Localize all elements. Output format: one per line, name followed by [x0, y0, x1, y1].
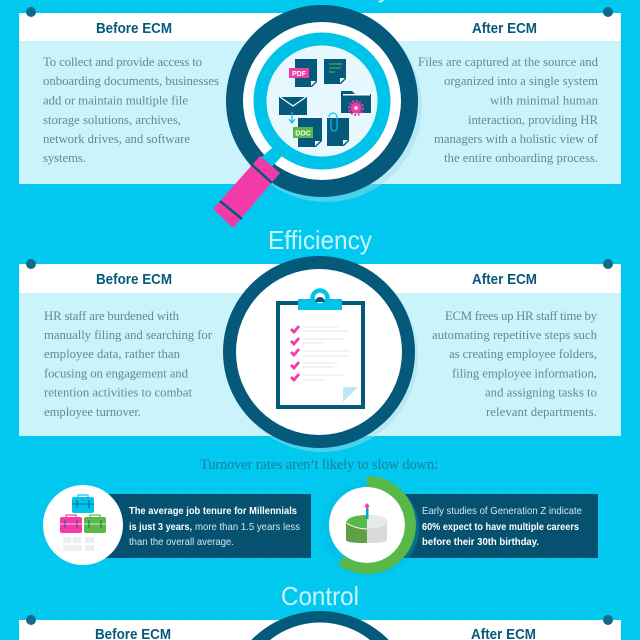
text: efficiency after [432, 309, 598, 419]
text: efficiency before: HR staff are burdened with [44, 309, 180, 323]
icon: doc document: DOC [295, 130, 311, 138]
callout: millennials tenure [43, 485, 311, 565]
text: efficiency after: relevant departments. [486, 405, 597, 419]
text: accessibility after: organized into a single system [444, 74, 598, 88]
text: generation z callout: Early studies of Generation Z indicate [422, 505, 582, 517]
text: accessibility after: Files are captured at the source and [418, 55, 599, 69]
chart: 60 percent ring [341, 482, 410, 568]
text: millennials callout: The average job tenure for Millennials [129, 505, 297, 517]
text: efficiency after: and assigning tasks to [485, 386, 597, 400]
panel: accessibility comparison: After ECM [472, 21, 537, 37]
text: millennials callout: is just 3 years, [129, 521, 192, 533]
text: efficiency before: employee data, rather than [44, 347, 181, 361]
text: efficiency before: retention activities to combat [44, 386, 192, 400]
text: accessibility before: storage solutions, archives, [43, 113, 181, 127]
text: efficiency after: as creating employee folders, [449, 347, 597, 361]
text: accessibility after: interaction, providing HR [468, 113, 598, 127]
text: millennials callout [129, 505, 300, 548]
panel: efficiency comparison [19, 259, 621, 436]
icon: magnifying glass with documents [213, 5, 422, 228]
icon: paperclip document [327, 113, 349, 146]
text: efficiency after: automating repetitive steps such [432, 328, 598, 342]
text: accessibility before: add or maintain multiple file [43, 94, 188, 108]
text: millennials callout: than the overall average. [129, 536, 234, 548]
panel: accessibility comparison [19, 7, 621, 184]
text: accessibility before: onboarding documents, businesses [43, 74, 219, 88]
section title: control: Control [281, 581, 359, 611]
callout: generation z careers [321, 479, 598, 577]
icon: doc document [293, 118, 322, 147]
text: efficiency before: employee turnover. [44, 405, 141, 419]
text: generation z callout: 60% expect to have multiple careers [422, 521, 579, 533]
icon: briefcases [60, 495, 106, 551]
panel: control comparison [19, 615, 621, 640]
text: accessibility before [43, 55, 219, 165]
icon: pdf document: PDF [292, 71, 307, 78]
icon: text document [324, 59, 346, 84]
text: efficiency before [44, 309, 213, 419]
text: accessibility before: network drives, and software [43, 132, 190, 146]
text: accessibility before: systems. [43, 151, 86, 165]
panel: accessibility comparison: Before ECM [96, 21, 172, 37]
text: generation z callout: before their 30th birthday. [422, 536, 539, 548]
icon: birthday cake [346, 503, 388, 543]
text: accessibility after: managers with a holistic view of [434, 132, 599, 146]
text: turnover heading: Turnover rates aren’t likely to slow down: [200, 457, 438, 473]
icon: pdf document [289, 59, 317, 87]
text: accessibility after: with minimal human [490, 94, 599, 108]
text: efficiency before: focusing on engagement and [44, 366, 189, 380]
text: accessibility before: To collect and provide access to [43, 55, 202, 69]
text: efficiency after: filing employee information, [452, 366, 597, 380]
text: generation z callout [422, 505, 582, 548]
text: millennials callout: more than 1.5 years less [195, 521, 300, 533]
icon: envelope [279, 97, 307, 123]
text: accessibility after [418, 55, 599, 165]
panel: efficiency comparison: After ECM [472, 272, 537, 288]
icon: clipboard checklist [223, 256, 418, 452]
panel: efficiency comparison: Before ECM [96, 272, 172, 288]
text: efficiency after: ECM frees up HR staff time by [445, 309, 598, 323]
text: accessibility after: the entire onboarding process. [444, 151, 598, 165]
icon: folder with gear [341, 91, 371, 115]
icon: control circle [251, 611, 389, 640]
text: efficiency before: manually filing and searching for [44, 328, 213, 342]
section title: efficiency: Efficiency [268, 225, 372, 255]
